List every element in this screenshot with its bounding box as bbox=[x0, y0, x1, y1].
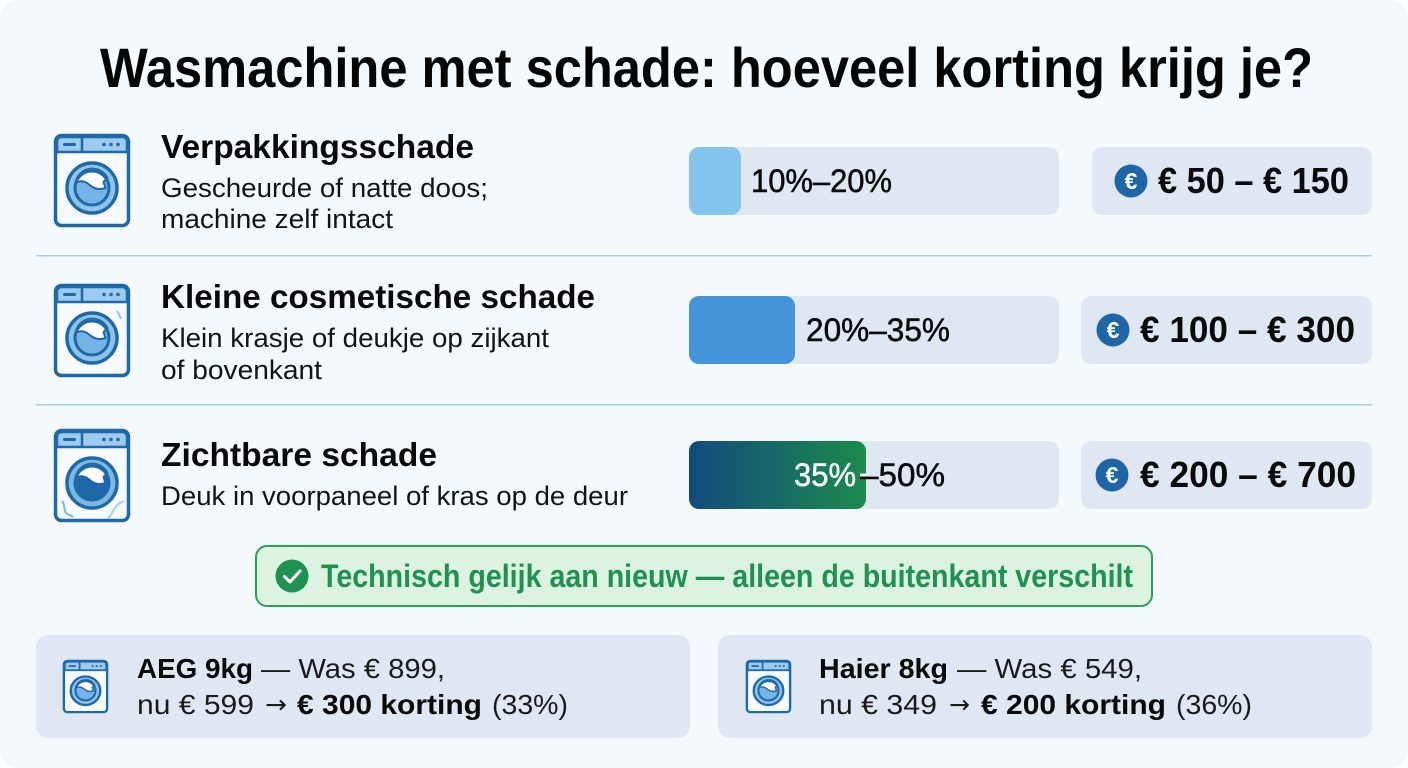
text: AEG discount: (33%) bbox=[492, 689, 568, 720]
text: Haier discount: (36%) bbox=[1176, 689, 1252, 720]
description: machine zelf intact bbox=[161, 204, 394, 234]
callout: technically equal to new: Technisch gelijk aan nieuw — alleen de buitenkant verschilt bbox=[321, 558, 1133, 594]
bar: 10%-20% bbox=[689, 147, 1059, 215]
panel: zichtbare schade row bbox=[56, 430, 1372, 520]
heading: Zichtbare schade bbox=[161, 436, 437, 473]
heading: Kleine cosmetische schade bbox=[161, 278, 595, 315]
price pill: € bbox=[1107, 317, 1120, 343]
bar: 10%-20%: 10%–20% bbox=[751, 163, 892, 199]
text: Haier discount: — Was € 549, bbox=[957, 653, 1142, 684]
icon: small washing machine bbox=[64, 661, 107, 712]
text: AEG discount: → bbox=[265, 690, 287, 719]
bar: 35%-50% bbox=[689, 441, 1059, 509]
text: AEG discount: — Was € 899, bbox=[261, 653, 445, 684]
text: AEG discount: nu € 599 bbox=[137, 689, 254, 720]
panel: AEG example bbox=[36, 635, 690, 738]
text: Haier discount: Haier 8kg bbox=[819, 653, 948, 684]
icon: check mark bbox=[276, 560, 308, 592]
panel: verpakkingsschade row bbox=[56, 128, 1372, 234]
price pill bbox=[1081, 441, 1372, 509]
icon: small washing machine bbox=[747, 661, 790, 712]
price pill: € bbox=[1106, 462, 1119, 488]
text: Haier discount: nu € 349 bbox=[819, 689, 937, 720]
price pill: € bbox=[1125, 168, 1138, 194]
description bbox=[161, 323, 550, 385]
description: Gescheurde of natte doos; bbox=[161, 173, 488, 203]
description: Deuk in voorpaneel of kras op de deur bbox=[161, 481, 628, 511]
price pill bbox=[1092, 147, 1372, 215]
bar: 20%-35% bbox=[689, 296, 1059, 364]
description: Klein krasje of deukje op zijkant bbox=[161, 323, 550, 353]
price pill bbox=[1081, 296, 1372, 364]
panel: Haier example bbox=[718, 635, 1372, 738]
text: Haier discount bbox=[819, 653, 1252, 720]
text: AEG discount: AEG 9kg bbox=[137, 653, 253, 684]
bar: 35%-50%: –50% bbox=[860, 457, 945, 493]
text: AEG discount: € 300 korting bbox=[297, 689, 482, 720]
description: of bovenkant bbox=[161, 355, 323, 385]
description bbox=[161, 173, 488, 234]
text: AEG discount bbox=[137, 653, 568, 720]
icon: washing machine with visible damage bbox=[56, 430, 128, 520]
callout: technically equal to new bbox=[256, 546, 1152, 606]
price pill: € 50 – € 150 bbox=[1158, 160, 1349, 201]
text: Haier discount: € 200 korting bbox=[981, 689, 1166, 720]
price pill: € 200 – € 700 bbox=[1140, 454, 1356, 495]
bar: 35%-50%: 35% bbox=[794, 457, 856, 493]
title: Wasmachine met schade: hoeveel korting krijg je? bbox=[100, 36, 1313, 99]
price pill: € 100 – € 300 bbox=[1140, 309, 1355, 350]
heading: Verpakkingsschade bbox=[161, 128, 474, 165]
bar: 20%-35%: 20%–35% bbox=[806, 312, 950, 348]
panel: kleine cosmetische schade row bbox=[56, 278, 1372, 385]
icon: washing machine with small scratch bbox=[56, 286, 128, 376]
text: Haier discount: → bbox=[949, 690, 970, 719]
icon: washing machine with packaging damage bbox=[56, 136, 128, 226]
